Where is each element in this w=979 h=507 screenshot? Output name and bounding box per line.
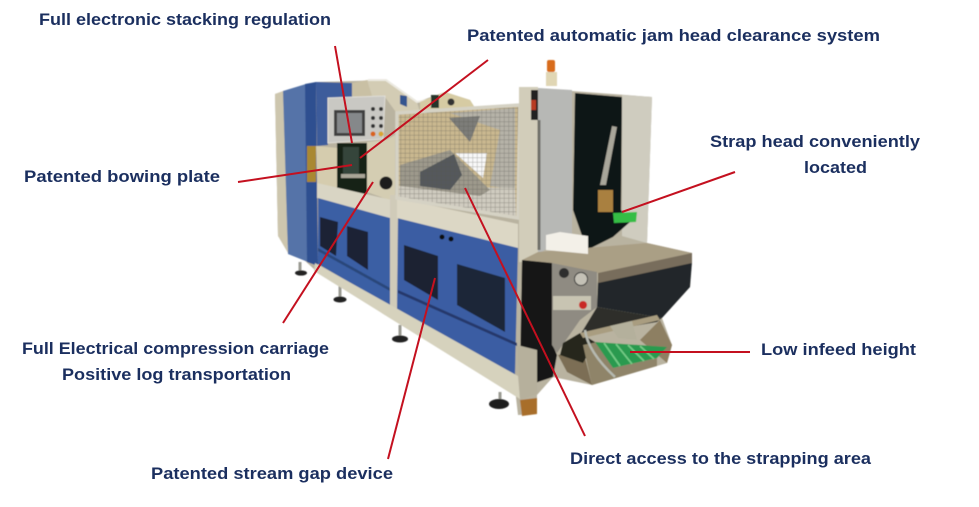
red callout lines [238, 46, 750, 459]
line: jam head clearance [360, 60, 488, 158]
black side column [520, 260, 557, 383]
mesh safety guard [397, 105, 520, 218]
line: infeed height [630, 351, 750, 353]
label: strapping area: Direct access to the strapping area [570, 449, 872, 468]
label: jam head clearance: Patented automatic jam head clearance system [467, 26, 880, 45]
label: stream gap: Patented stream gap device [151, 464, 393, 483]
label: compression carriage: Positive log transportation [62, 365, 291, 384]
label: compression carriage [22, 339, 329, 384]
infeed table top [522, 243, 692, 273]
white band under guard [397, 198, 518, 248]
label: compression carriage: Full Electrical compression carriage [22, 339, 329, 358]
base rail [314, 263, 520, 399]
strap head unit [573, 93, 637, 250]
machine silhouette backing [275, 80, 692, 415]
top hood [367, 79, 475, 115]
label: bowing plate: Patented bowing plate [24, 167, 220, 186]
ladder rail [538, 120, 540, 250]
line: stacking regulation [335, 46, 352, 143]
white box [546, 232, 588, 254]
label: infeed height: Low infeed height [761, 340, 916, 359]
line: compression carriage [283, 182, 373, 323]
infeed tray [558, 307, 672, 385]
central post [390, 195, 399, 318]
right beige post [622, 95, 652, 243]
left beige band [317, 183, 392, 222]
left control tower [275, 80, 372, 266]
light grey strap housing [538, 88, 572, 254]
machine illustration [275, 60, 692, 416]
line: strapping area [465, 188, 585, 436]
feet [295, 262, 509, 409]
label: strap head: located [804, 158, 867, 177]
label: strap head [710, 132, 921, 177]
warning beacon and stop box [531, 60, 557, 120]
control panel [328, 96, 385, 143]
label: stacking regulation: Full electronic stacking regulation [39, 10, 331, 29]
line: stream gap [388, 278, 435, 459]
compression carriage column [367, 135, 395, 202]
line: strap head [622, 172, 735, 212]
label: strap head: Strap head conveniently [710, 132, 921, 151]
hopper [597, 253, 692, 318]
right blue cabinet [397, 218, 518, 375]
front corner foot [517, 345, 537, 416]
pneumatic controls [552, 263, 597, 353]
bowing plate area [337, 143, 367, 194]
right frame post [519, 87, 538, 262]
left blue cabinet [318, 198, 390, 306]
line: bowing plate [238, 165, 352, 182]
